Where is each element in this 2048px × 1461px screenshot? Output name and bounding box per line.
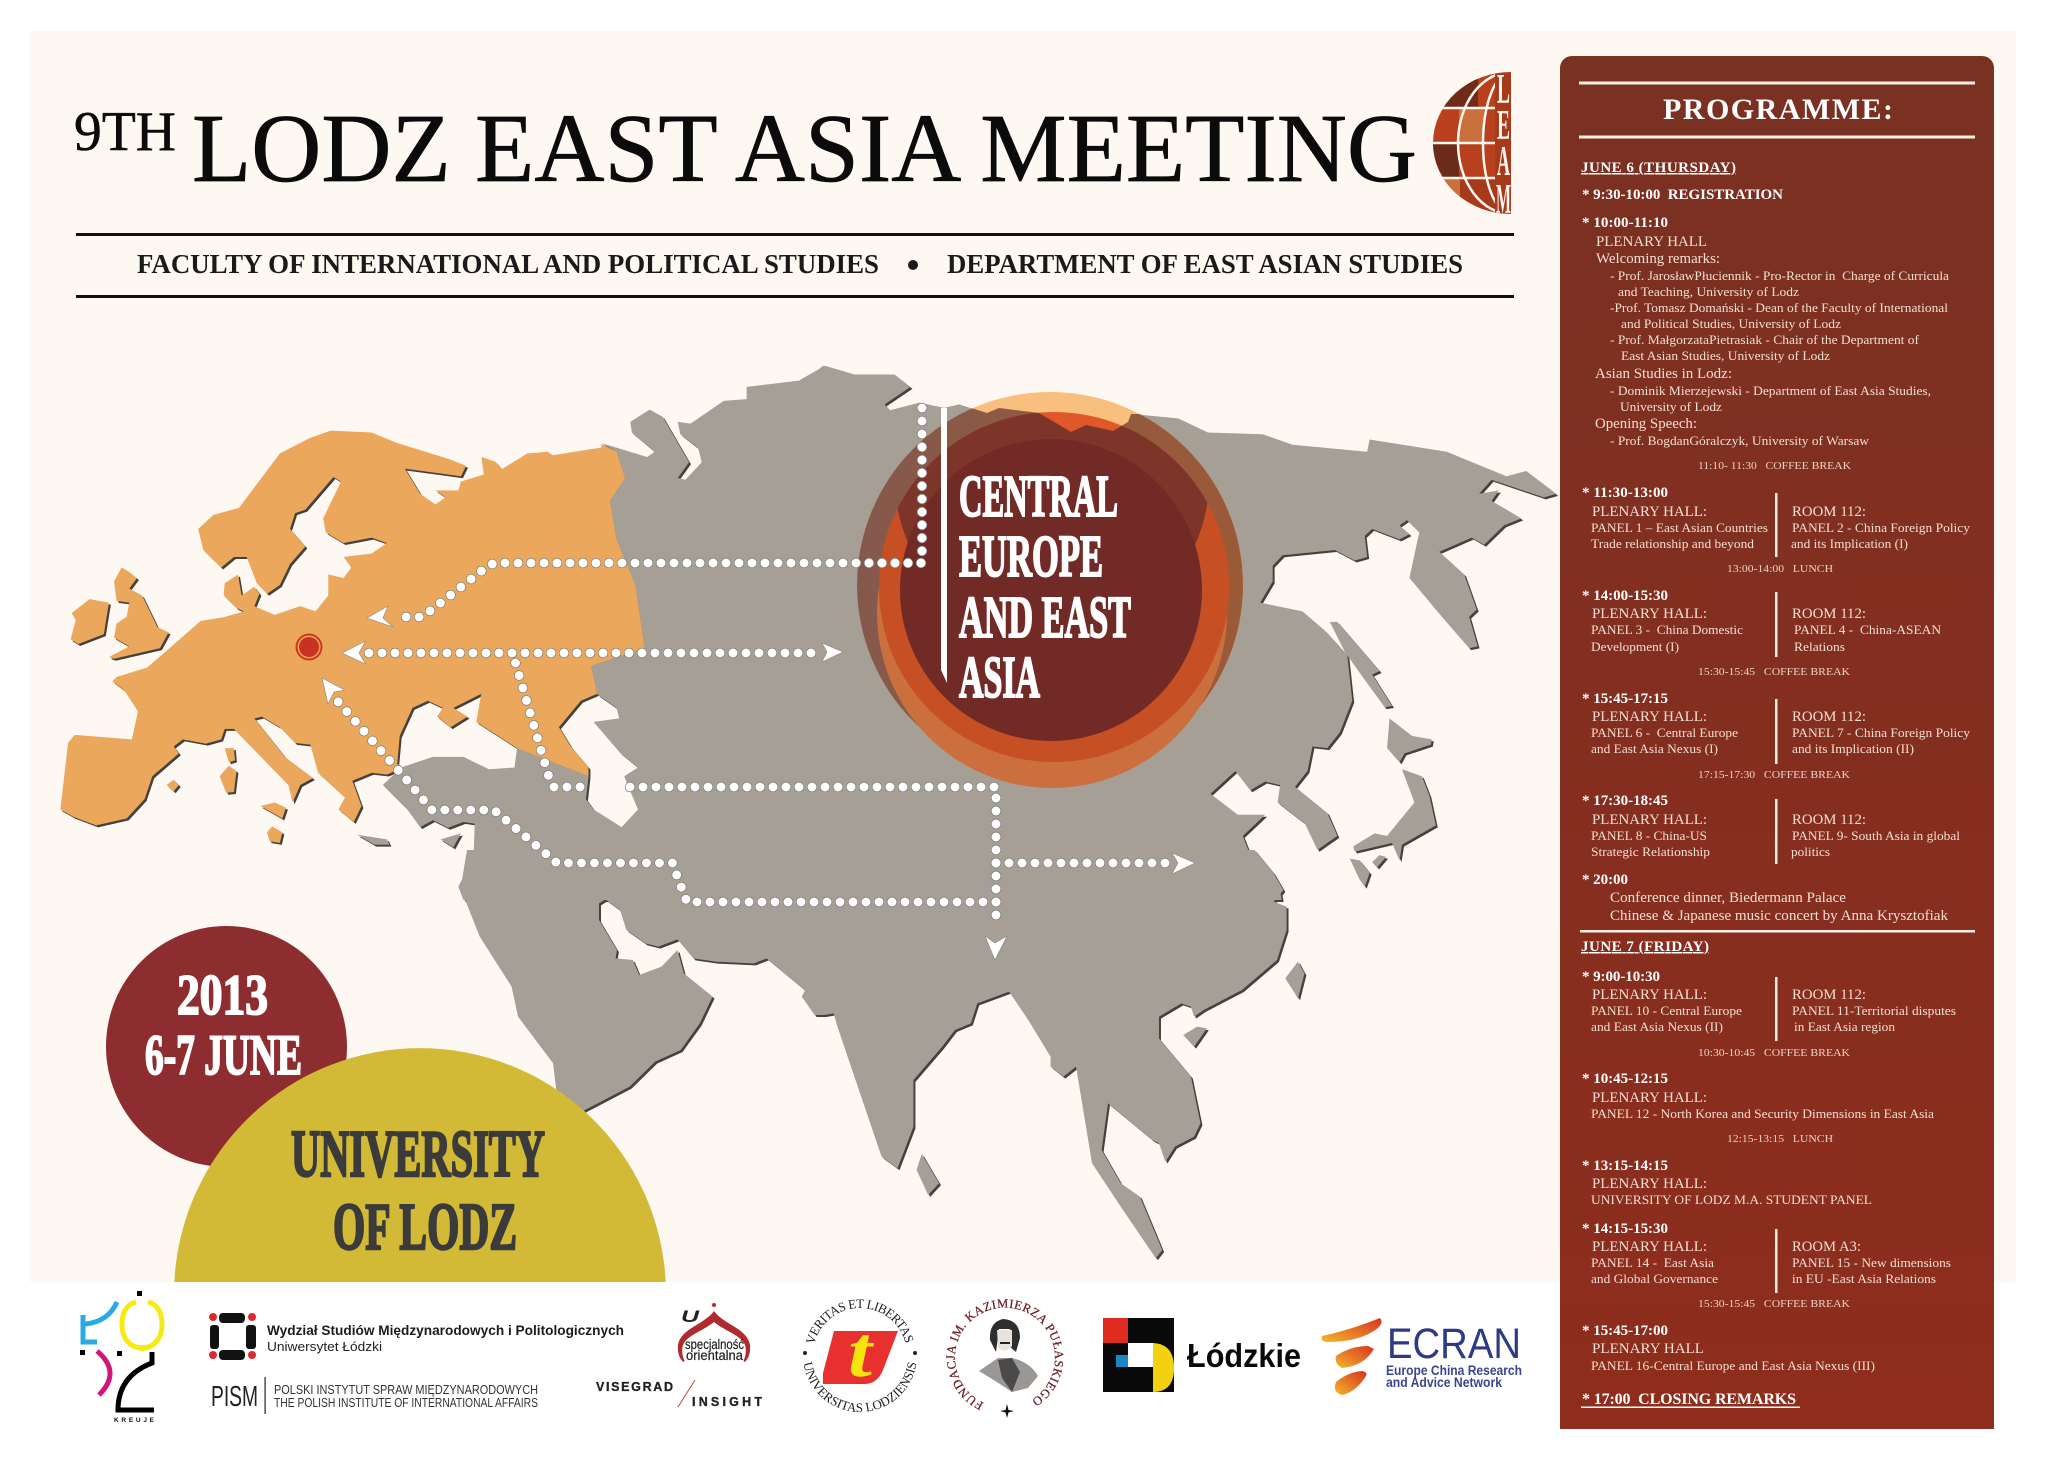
logo: Pulaski Foundation seal: FUNDACJA IM. KAZIMIERZA PUŁASKIEGO — [946, 1299, 1064, 1410]
icon: LEAM globe logo: L — [1497, 67, 1510, 113]
June 6 schedule: and East Asia Nexus (I) — [1591, 742, 1718, 756]
June 6 schedule: politics — [1791, 845, 1830, 859]
logo: ECRAN: ECRAN — [1387, 1320, 1521, 1368]
icon: LEAM globe logo: M — [1496, 177, 1511, 223]
date badge: 6-7 JUNE — [145, 1024, 302, 1087]
June 7 schedule: in EU -East Asia Relations — [1792, 1272, 1936, 1286]
June 6 schedule: East Asian Studies, University of Lodz — [1621, 349, 1831, 363]
June 6 schedule: PLENARY HALL: — [1592, 504, 1707, 520]
June 7 schedule: PLENARY HALL: — [1592, 1176, 1707, 1192]
June 6 schedule: ROOM 112: — [1792, 709, 1866, 725]
June 7 schedule: 12:15-13:15 LUNCH — [1727, 1133, 1833, 1145]
June 6 schedule: ROOM 112: — [1792, 504, 1866, 520]
June 6 schedule: ROOM 112: — [1792, 812, 1866, 828]
logo: Lodz Kreuje — [80, 1291, 162, 1424]
June 7 schedule: PLENARY HALL: — [1592, 1090, 1707, 1106]
June 6 schedule: 11:10- 11:30 COFFEE BREAK — [1698, 460, 1851, 472]
icon: LEAM globe logo: A — [1497, 139, 1510, 185]
logo: PISM: PISM — [211, 1381, 258, 1413]
June 6 schedule: PANEL 4 - China-ASEAN — [1794, 623, 1941, 637]
icon: LEAM globe logo: E — [1497, 103, 1510, 149]
June 6 schedule: - Prof. BogdanGóralczyk, University of Warsaw — [1610, 434, 1869, 448]
logo: Lodzkie region — [1103, 1318, 1301, 1392]
June 7 schedule: JUNE 7 (FRIDAY) — [1581, 939, 1709, 955]
logo: Faculty of International and Political Studies: Uniwersytet Łódzki — [267, 1339, 382, 1354]
logo: PISM: POLSKI INSTYTUT SPRAW MIĘDZYNARODOWYCH — [274, 1382, 538, 1397]
theme title in the circle: AND EAST — [959, 584, 1131, 650]
subtitle band: faculty and department — [76, 233, 1514, 298]
June 6 schedule: and its Implication (I) — [1791, 537, 1908, 551]
panel: programme — [1560, 56, 1994, 1429]
June 6 schedule: PLENARY HALL: — [1592, 812, 1707, 828]
venue badge: UNIVERSITY — [291, 1117, 545, 1191]
venue badge — [174, 1048, 666, 1282]
programme heading: PROGRAMME: — [1663, 93, 1893, 126]
June 7 schedule: ROOM A3: — [1792, 1239, 1861, 1255]
date badge: 2013 — [177, 964, 268, 1027]
June 7 schedule: PANEL 12 - North Korea and Security Dimensions in East Asia — [1591, 1107, 1935, 1121]
June 7 schedule: 10:30-10:45 COFFEE BREAK — [1698, 1047, 1850, 1059]
June 6 schedule: PLENARY HALL — [1596, 234, 1707, 250]
June 6 schedule — [1581, 160, 1971, 924]
arrowheads — [322, 606, 1195, 960]
logo: Faculty of International and Political Studies: Wydział Studiów Międzynarodowych i Politologicznych — [267, 1322, 624, 1338]
June 6 schedule: 13:00-14:00 LUNCH — [1727, 563, 1833, 575]
June 6 schedule: * 15:45-17:15 — [1582, 691, 1668, 707]
June 7 schedule: PANEL 14 - East Asia — [1591, 1256, 1715, 1270]
logo: ECRAN: and Advice Network — [1386, 1375, 1502, 1390]
theme title in the circle: ASIA — [959, 644, 1040, 710]
logo: Faculty of International and Political Studies — [209, 1313, 624, 1360]
dotted route lines with arrows — [322, 408, 1195, 960]
footer logos — [80, 1291, 1522, 1424]
June 7 schedule: PANEL 11-Territorial disputes — [1792, 1004, 1956, 1018]
June 7 schedule: and Global Governance — [1591, 1272, 1718, 1286]
June 6 schedule: Asian Studies in Lodz: — [1595, 366, 1732, 382]
June 7 schedule: in East Asia region — [1794, 1020, 1895, 1034]
logo: Visegrad Insight: VISEGRAD — [596, 1380, 673, 1394]
logo: Universitas Lodziensis seal: VERITAS ET LIBERTAS — [806, 1300, 914, 1342]
June 6 schedule: - Prof. JarosławPłuciennik - Pro-Rector in Charge of Curricula — [1610, 269, 1950, 283]
June 6 schedule: Opening Speech: — [1595, 416, 1697, 432]
logo: Visegrad Insight — [596, 1380, 762, 1409]
June 7 schedule: * 13:15-14:15 — [1582, 1158, 1668, 1174]
June 6 schedule: PANEL 6 - Central Europe — [1591, 726, 1738, 740]
theme title in the circle: CENTRAL — [959, 463, 1118, 529]
venue badge: OF LODZ — [333, 1190, 517, 1264]
theme title in the circle — [941, 408, 1131, 710]
logo: specjalnosc orientalna: specjalność — [685, 1337, 744, 1352]
June 6 schedule: PLENARY HALL: — [1592, 709, 1707, 725]
logo: Visegrad Insight: INSIGHT — [692, 1395, 762, 1409]
June 7 schedule: and East Asia Nexus (II) — [1591, 1020, 1723, 1034]
logo: ECRAN: Europe China Research — [1386, 1363, 1522, 1378]
June 6 schedule: * 17:30-18:45 — [1582, 793, 1668, 809]
June 7 schedule: PANEL 16-Central Europe and East Asia Nexus (III) — [1591, 1359, 1875, 1373]
June 7 schedule: PLENARY HALL — [1592, 1341, 1704, 1357]
overlapping circles behind the theme title — [857, 392, 1243, 788]
title: 9TH — [74, 101, 176, 163]
June 6 schedule: * 14:00-15:30 — [1582, 588, 1668, 604]
June 7 schedule: * 14:15-15:30 — [1582, 1221, 1668, 1237]
title: LODZ EAST ASIA MEETING — [192, 95, 1417, 202]
June 6 schedule: University of Lodz — [1620, 400, 1723, 414]
June 6 schedule: PANEL 9- South Asia in global — [1792, 829, 1961, 843]
logo: PISM — [211, 1377, 538, 1414]
logo: Lodzkie region: Łódzkie — [1187, 1337, 1301, 1374]
logo: PISM: THE POLISH INSTITUTE OF INTERNATIONAL AFFAIRS — [274, 1395, 538, 1410]
June 7 schedule: * 9:00-10:30 — [1582, 969, 1660, 985]
June 6 schedule: 17:15-17:30 COFFEE BREAK — [1698, 769, 1850, 781]
logo: specjalnosc orientalna — [678, 1303, 750, 1363]
June 6 schedule: Chinese & Japanese music concert by Anna Krysztofiak — [1610, 908, 1949, 924]
June 6 schedule: and Teaching, University of Lodz — [1618, 285, 1800, 299]
route outlines — [338, 408, 1168, 928]
map of Eurasia — [60, 366, 1556, 1258]
icon: LEAM globe logo — [1433, 72, 1511, 214]
June 7 schedule: PANEL 10 - Central Europe — [1591, 1004, 1742, 1018]
logo: Universitas Lodziensis seal: UNIVERSITAS LODZIENSIS — [804, 1361, 916, 1412]
June 7 schedule: * 17:00 CLOSING REMARKS — [1582, 1391, 1796, 1408]
June 6 schedule: Relations — [1794, 640, 1845, 654]
June 6 schedule: Conference dinner, Biedermann Palace — [1610, 890, 1846, 906]
June 6 schedule: Strategic Relationship — [1591, 845, 1710, 859]
June 6 schedule: * 20:00 — [1582, 872, 1628, 888]
June 7 schedule: * 10:45-12:15 — [1582, 1071, 1668, 1087]
Europe landmass in orange — [60, 431, 645, 843]
June 6 schedule: - Dominik Mierzejewski - Department of East Asia Studies, — [1610, 384, 1931, 398]
June 6 schedule: ROOM 112: — [1792, 606, 1866, 622]
June 6 schedule: and its Implication (II) — [1792, 742, 1914, 756]
June 6 schedule: PANEL 8 - China-US — [1591, 829, 1707, 843]
June 7 schedule: * 15:45-17:00 — [1582, 1323, 1668, 1339]
date badge — [106, 926, 347, 1167]
June 6 schedule: * 9:30-10:00 REGISTRATION — [1582, 187, 1783, 203]
logo: Universitas Lodziensis seal — [803, 1300, 917, 1412]
Asia landmass in grey — [357, 366, 1556, 1258]
June 6 schedule: and Political Studies, University of Lodz — [1621, 317, 1842, 331]
route dots — [338, 408, 1168, 928]
June 6 schedule: Development (I) — [1591, 640, 1679, 654]
June 6 schedule: PANEL 3 - China Domestic — [1591, 623, 1744, 637]
June 7 schedule: ROOM 112: — [1792, 987, 1866, 1003]
June 7 schedule: UNIVERSITY OF LODZ M.A. STUDENT PANEL — [1591, 1193, 1872, 1207]
June 6 schedule: Trade relationship and beyond — [1591, 537, 1754, 551]
June 6 schedule: PANEL 7 - China Foreign Policy — [1792, 726, 1971, 740]
June 6 schedule: * 10:00-11:10 — [1582, 215, 1668, 231]
subtitle band: faculty and department: DEPARTMENT OF EAST ASIAN STUDIES — [947, 249, 1463, 279]
June 6 schedule: * 11:30-13:00 — [1582, 485, 1668, 501]
logo: ECRAN — [1322, 1318, 1522, 1395]
icon: Lodz location marker — [296, 634, 322, 660]
June 6 schedule: PANEL 1 – East Asian Countries — [1591, 521, 1768, 535]
theme title in the circle: EUROPE — [959, 523, 1103, 589]
June 7 schedule: PLENARY HALL: — [1592, 1239, 1707, 1255]
logo: specjalnosc orientalna: U — [681, 1307, 700, 1326]
June 6 schedule: PANEL 2 - China Foreign Policy — [1792, 521, 1971, 535]
June 6 schedule: PLENARY HALL: — [1592, 606, 1707, 622]
June 6 schedule: Welcoming remarks: — [1596, 251, 1720, 267]
June 6 schedule: JUNE 6 (THURSDAY) — [1581, 160, 1736, 176]
June 7 schedule — [1581, 939, 1956, 1408]
subtitle band: faculty and department: FACULTY OF INTERNATIONAL AND POLITICAL STUDIES — [137, 249, 879, 279]
June 7 schedule: PANEL 15 - New dimensions — [1792, 1256, 1951, 1270]
logo: Lodz Kreuje: KREUJE — [114, 1417, 155, 1424]
logo: specjalnosc orientalna: orientalna — [686, 1348, 743, 1363]
June 6 schedule: 15:30-15:45 COFFEE BREAK — [1698, 666, 1850, 678]
June 6 schedule: -Prof. Tomasz Domański - Dean of the Faculty of International — [1610, 301, 1949, 315]
June 6 schedule: - Prof. MałgorzataPietrasiak - Chair of the Department of — [1610, 333, 1920, 347]
June 7 schedule: PLENARY HALL: — [1592, 987, 1707, 1003]
June 7 schedule: 15:30-15:45 COFFEE BREAK — [1698, 1298, 1850, 1310]
logo: Universitas Lodziensis seal: t — [848, 1312, 874, 1392]
